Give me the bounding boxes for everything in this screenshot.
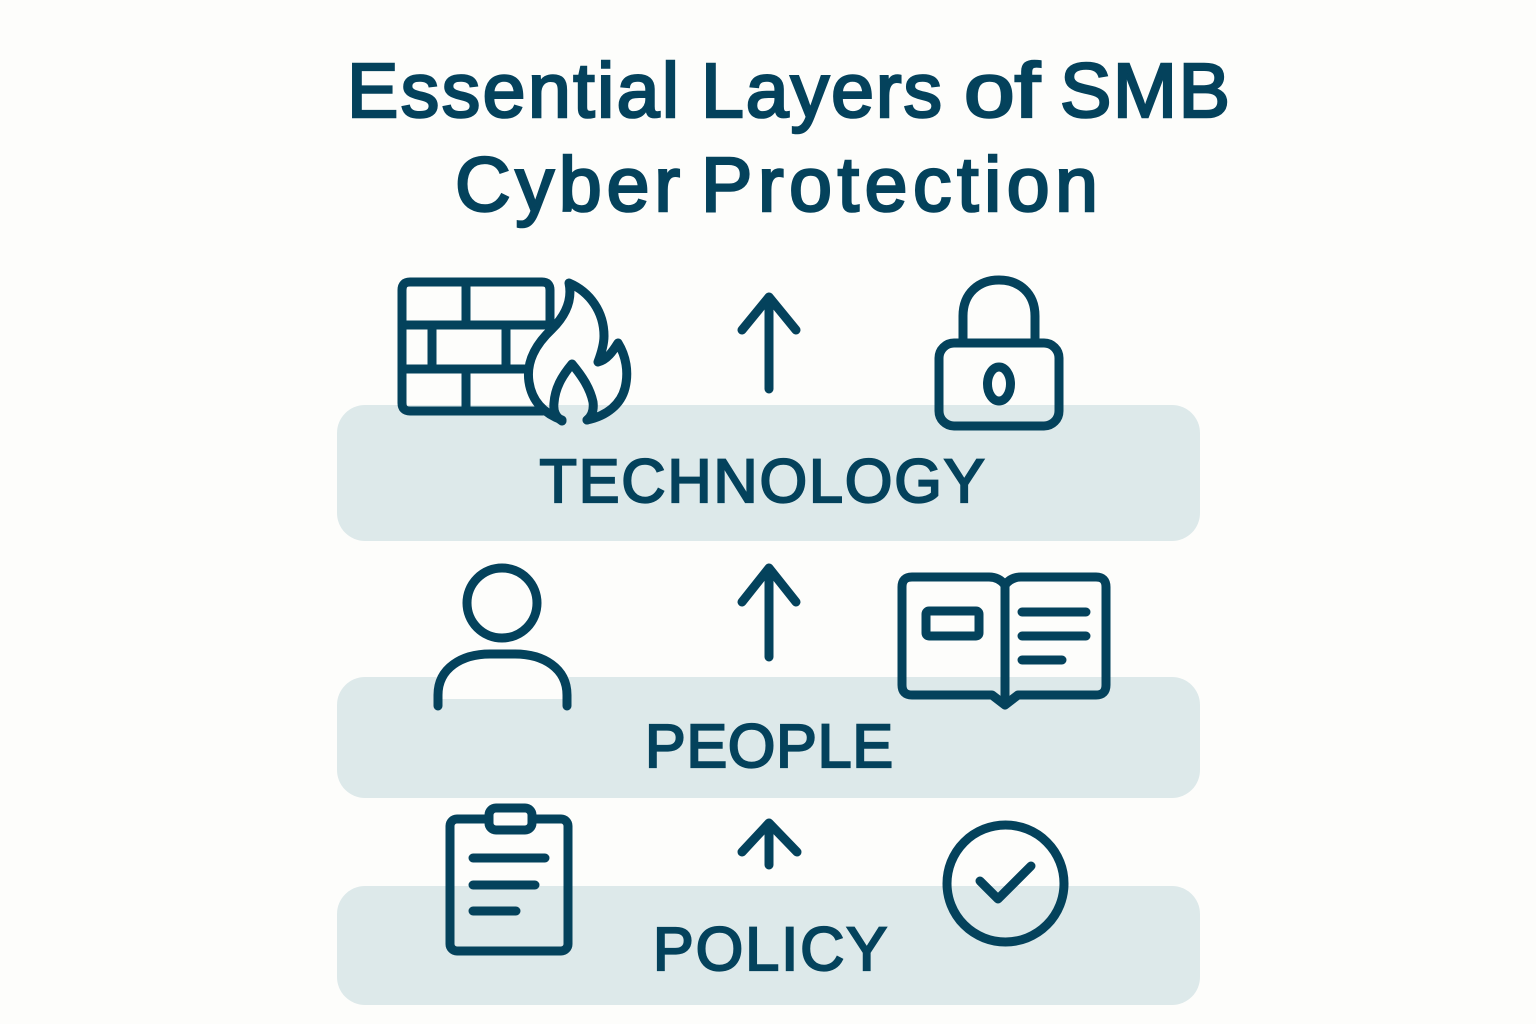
- icon: firewall: [402, 282, 627, 421]
- panel: technology: [337, 405, 1200, 541]
- label: policy: POLICY: [653, 915, 887, 983]
- icon: upward arrow top: [742, 297, 796, 389]
- icon: check circle: [947, 825, 1064, 942]
- title: Cyber: [455, 142, 680, 228]
- icon: upward arrow bottom: [742, 823, 797, 865]
- panel: policy: [337, 886, 1200, 1005]
- title: [347, 48, 1230, 228]
- panel: people: [337, 677, 1200, 798]
- icon: padlock: [939, 280, 1059, 426]
- icon: person: [438, 568, 567, 706]
- title: SMB: [1060, 48, 1230, 134]
- title: Layers: [701, 48, 942, 134]
- icon: upward arrow middle: [742, 568, 796, 657]
- icon: clipboard: [450, 808, 568, 951]
- label: people: PEOPLE: [645, 712, 893, 780]
- title: Essential: [347, 48, 679, 134]
- title: Protection: [701, 142, 1098, 228]
- icon: open book: [902, 577, 1106, 705]
- label: technology: TECHNOLOGY: [540, 447, 984, 515]
- title: of: [964, 48, 1041, 134]
